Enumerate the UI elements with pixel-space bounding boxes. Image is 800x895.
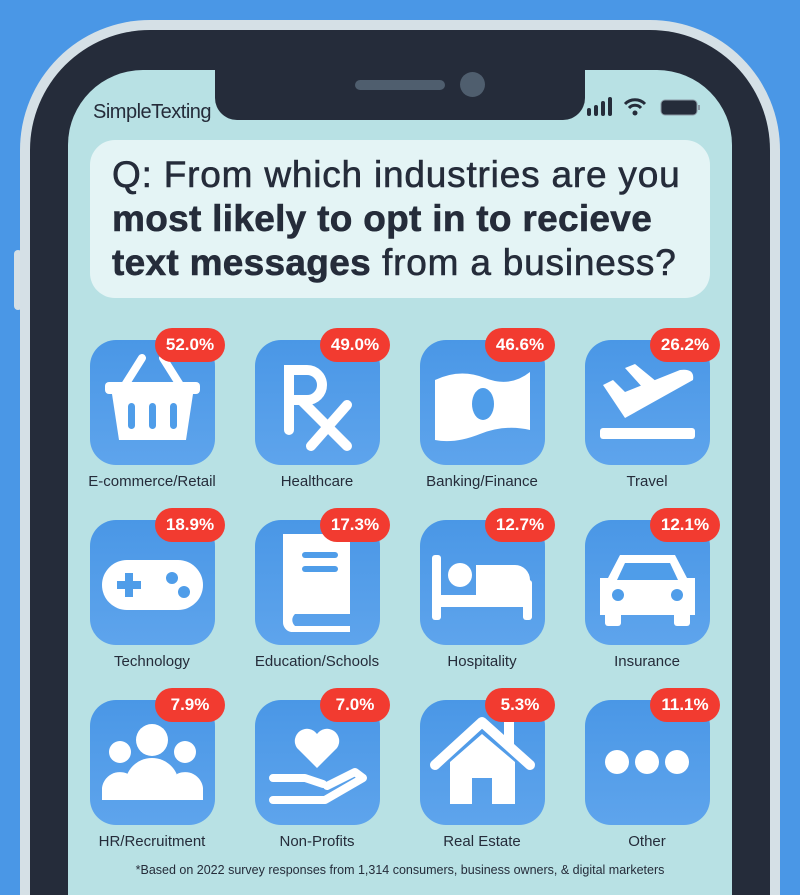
question box: [90, 140, 710, 298]
logo: SimpleTexting: [93, 101, 211, 123]
item: technology: [90, 508, 225, 670]
item: travel: Travel: [626, 473, 668, 490]
item: real estate: Real Estate: [443, 833, 521, 850]
status icons: [587, 97, 700, 116]
item: nonprofits: Non-Profits: [279, 833, 355, 850]
item: hospitality: 12.7%: [496, 515, 544, 534]
screen: [68, 70, 732, 895]
item: real estate: [420, 688, 555, 850]
speaker and camera: [355, 80, 445, 90]
item: other: 11.1%: [661, 695, 709, 714]
item: education: 17.3%: [331, 515, 379, 534]
item: travel: [585, 328, 720, 490]
notch: [215, 60, 585, 120]
item: healthcare: Healthcare: [281, 473, 353, 490]
side buttons: [14, 250, 22, 310]
item: technology: 18.9%: [166, 515, 214, 534]
item: hr: HR/Recruitment: [99, 833, 205, 850]
item: education: Education/Schools: [255, 653, 379, 670]
item: nonprofits: [255, 688, 390, 850]
item: banking: [420, 328, 555, 490]
item: banking: 46.6%: [496, 335, 544, 354]
item: hr: [90, 688, 225, 850]
item: hospitality: [420, 508, 555, 670]
item: banking: Banking/Finance: [426, 473, 538, 490]
question box: most likely to opt in to recieve: [112, 198, 652, 239]
question box: Q: From which industries are you: [112, 154, 680, 195]
item: other: [585, 688, 720, 850]
item: healthcare: 49.0%: [331, 335, 379, 354]
item: ecommerce: [88, 328, 225, 490]
item: insurance: 12.1%: [661, 515, 709, 534]
item: ecommerce: E-commerce/Retail: [88, 473, 216, 490]
item: insurance: [585, 508, 720, 670]
item: hr: 7.9%: [171, 695, 209, 714]
item: insurance: Insurance: [614, 653, 680, 670]
item: education: [255, 508, 390, 670]
item: travel: 26.2%: [661, 335, 709, 354]
item: ecommerce: 52.0%: [166, 335, 214, 354]
item: healthcare: [255, 328, 390, 490]
question box: text messages from a business?: [112, 242, 677, 283]
item: technology: Technology: [114, 653, 190, 670]
footnote: *Based on 2022 survey responses from 1,314 consumers, business owners, & digital marketers: [136, 863, 664, 877]
item: nonprofits: 7.0%: [336, 695, 374, 714]
item: real estate: 5.3%: [501, 695, 539, 714]
item: hospitality: Hospitality: [447, 653, 517, 670]
item: other: Other: [628, 833, 666, 850]
